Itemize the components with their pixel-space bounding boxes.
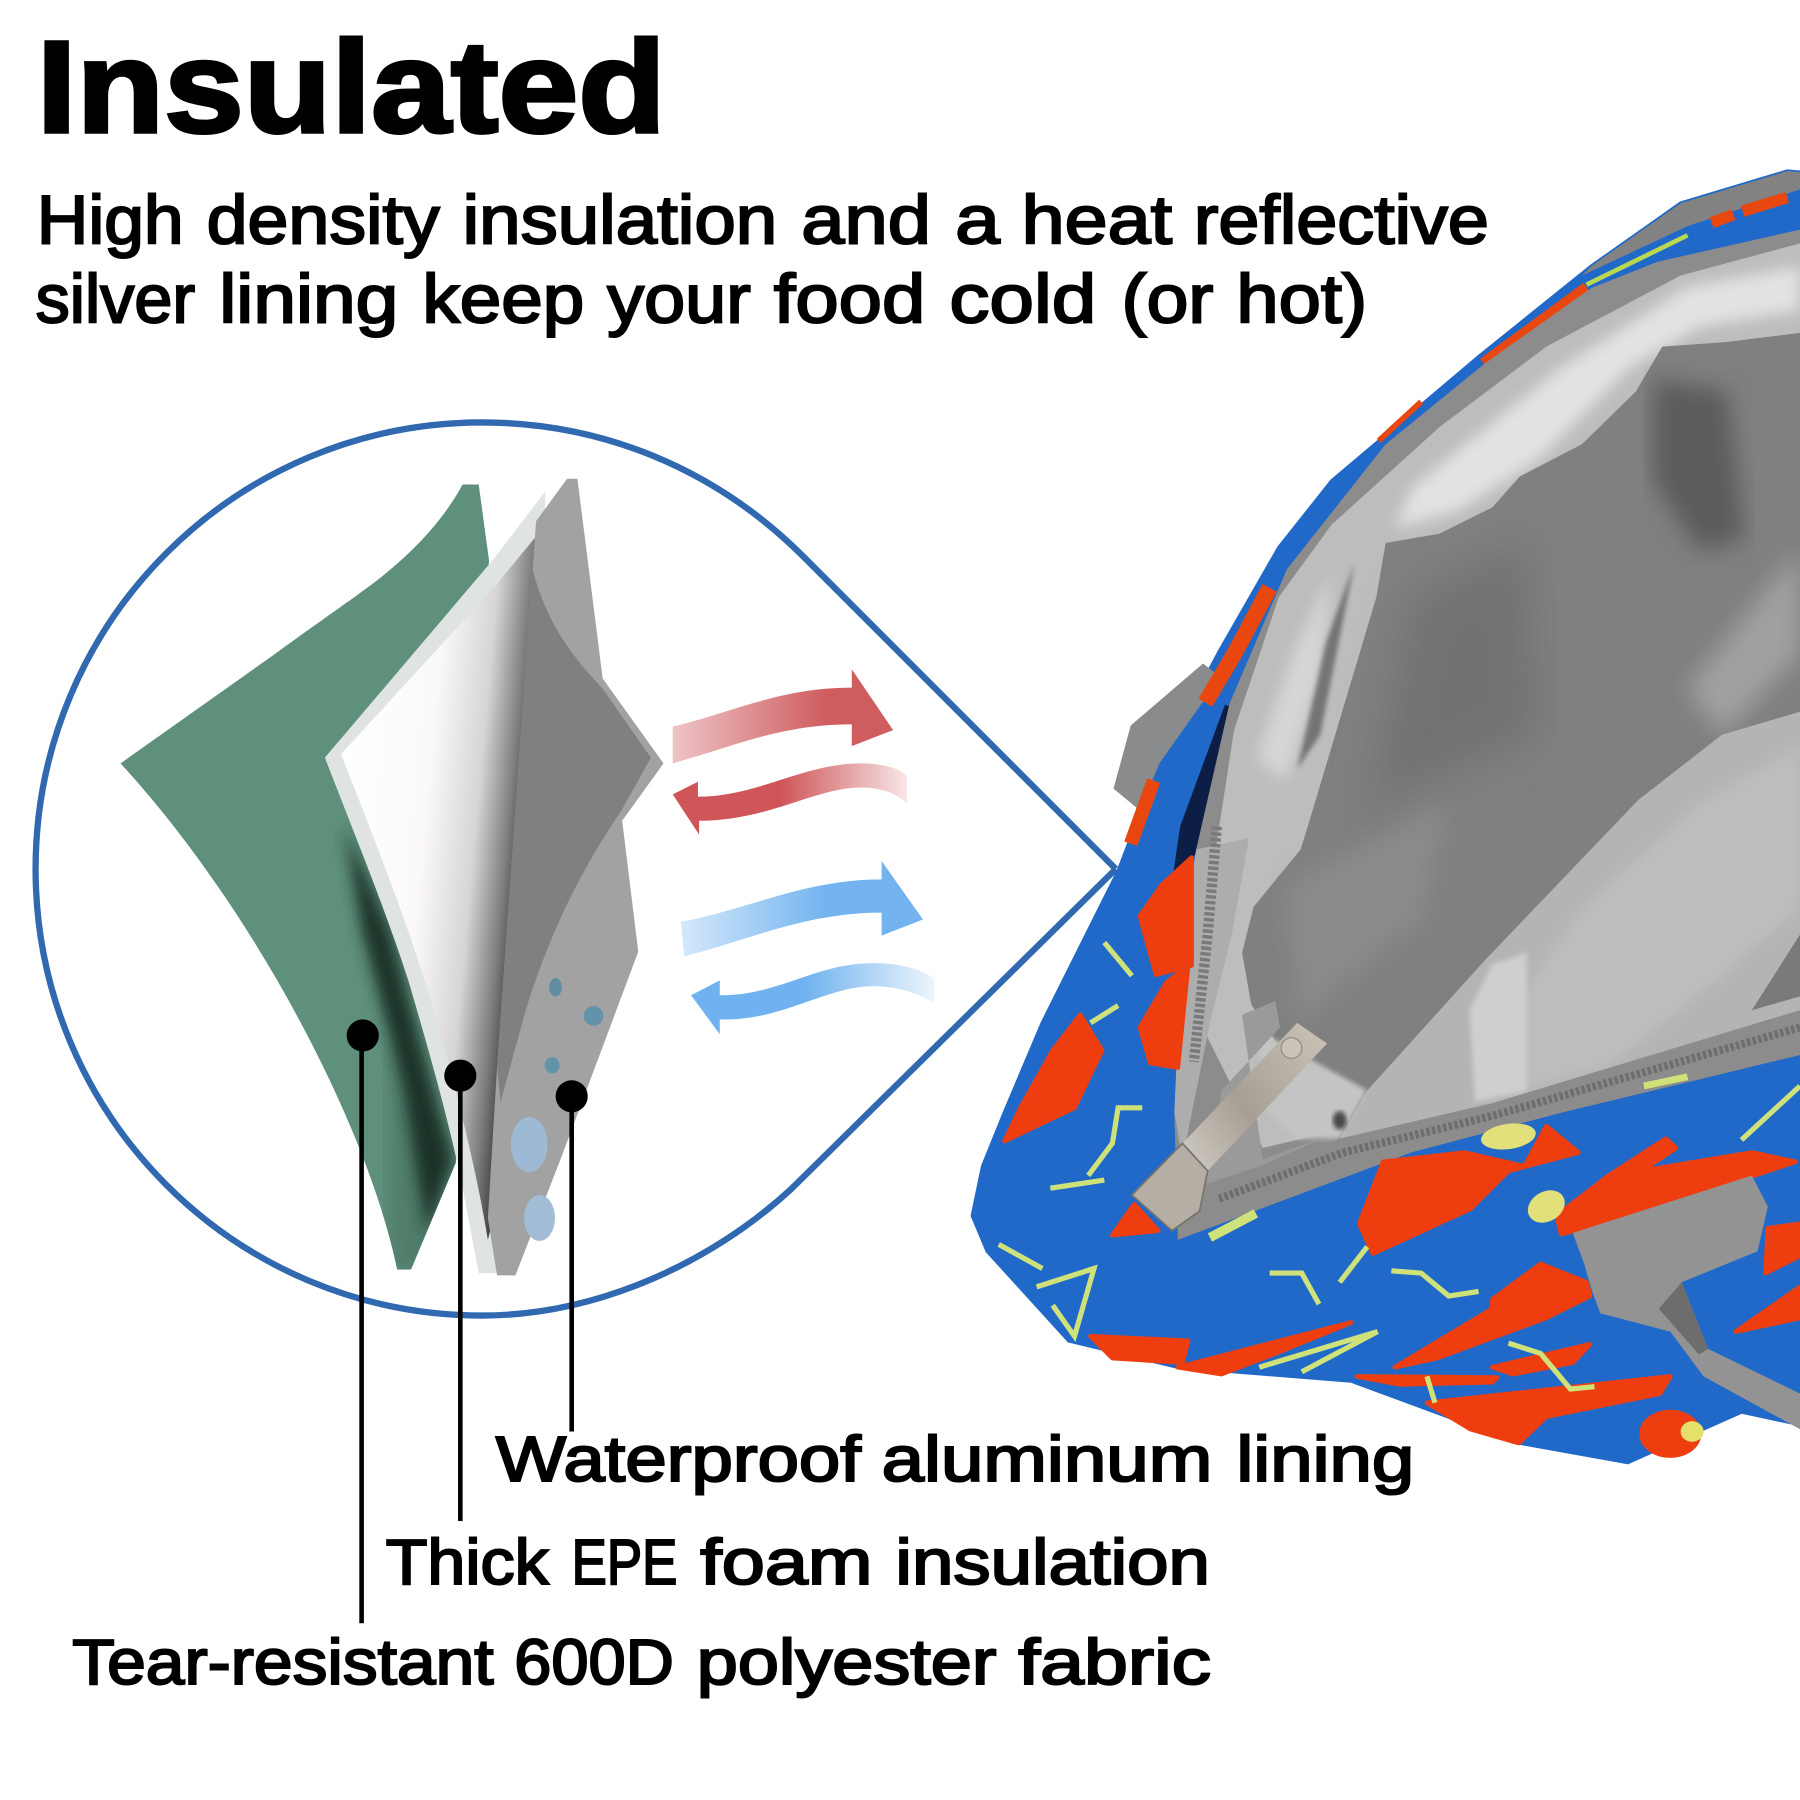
- label: foam insulation: Thick: [386, 1526, 550, 1598]
- label: foam insulation: foam: [700, 1526, 872, 1598]
- subtitle text: keep: [422, 261, 584, 338]
- label: aluminum lining: Waterproof: [496, 1423, 861, 1495]
- subtitle text: a: [955, 181, 1001, 258]
- subtitle text: [36, 181, 1489, 338]
- subtitle text: and: [801, 181, 931, 258]
- blue arrow in: [691, 963, 934, 1034]
- pointer: polyester fabric: [347, 1019, 379, 1623]
- subtitle text: your: [607, 261, 751, 338]
- title: Insulated: [37, 14, 666, 160]
- label: foam insulation: EPE: [572, 1526, 677, 1598]
- label: aluminum lining: aluminum: [882, 1423, 1212, 1495]
- bag outer fabric: [972, 171, 1800, 1463]
- pointer: foam: [444, 1060, 476, 1521]
- subtitle text: cold: [949, 261, 1096, 338]
- handle: [1573, 1176, 1800, 1429]
- subtitle text: reflective: [1194, 181, 1489, 258]
- zipper left: [1174, 838, 1249, 1159]
- label: aluminum lining: lining: [1236, 1423, 1414, 1495]
- subtitle text: High: [37, 181, 184, 258]
- label: polyester fabric: polyester: [697, 1626, 996, 1698]
- water droplets: [511, 978, 603, 1241]
- subtitle text: (or: [1122, 261, 1213, 338]
- grey aluminum layer: [488, 479, 664, 1275]
- heat and cold arrows: [673, 669, 934, 1034]
- white foam layer: [325, 491, 545, 1273]
- pointer: aluminum lining: [556, 1080, 588, 1432]
- dark gap: [1171, 705, 1234, 890]
- red arrow in: [673, 763, 907, 835]
- red arrow out: [673, 669, 893, 763]
- inner grey lining: [1242, 333, 1800, 1139]
- subtitle text: lining: [219, 261, 398, 338]
- subtitle text: hot): [1236, 261, 1367, 338]
- silver rim: [1205, 243, 1800, 1148]
- subtitle text: heat: [1022, 181, 1172, 258]
- subtitle text: density: [207, 181, 440, 258]
- light lining fold: [1340, 712, 1800, 1139]
- callout magnifier outline: [36, 422, 1116, 1316]
- lining shading: [1653, 379, 1745, 551]
- blue arrow out: [681, 861, 923, 956]
- dark aluminum face: [497, 569, 651, 1102]
- subtitle text: food: [774, 261, 925, 338]
- product photo: insulated bag: [972, 171, 1800, 1463]
- silver highlights: [1395, 266, 1800, 528]
- subtitle text: silver: [36, 261, 195, 338]
- inner tag: [1194, 1001, 1326, 1188]
- yellow squiggles: [999, 942, 1800, 1403]
- label: foam insulation: insulation: [895, 1526, 1210, 1598]
- side tab: [1114, 664, 1220, 810]
- red fabric shapes: [1004, 858, 1800, 1456]
- zipper base: [1174, 230, 1800, 1240]
- top grey rim: [1582, 171, 1800, 276]
- label: polyester fabric: 600D: [514, 1626, 674, 1698]
- subtitle text: insulation: [463, 181, 777, 258]
- zipper pull: [1132, 1023, 1327, 1231]
- material layers illustration: [115, 479, 664, 1275]
- zipper bottom: [1178, 1010, 1800, 1240]
- green fabric layer: [115, 482, 494, 1274]
- rim color bands: [1131, 197, 1787, 844]
- label: polyester fabric: Tear-resistant: [72, 1626, 494, 1698]
- label: polyester fabric: fabric: [1018, 1626, 1211, 1698]
